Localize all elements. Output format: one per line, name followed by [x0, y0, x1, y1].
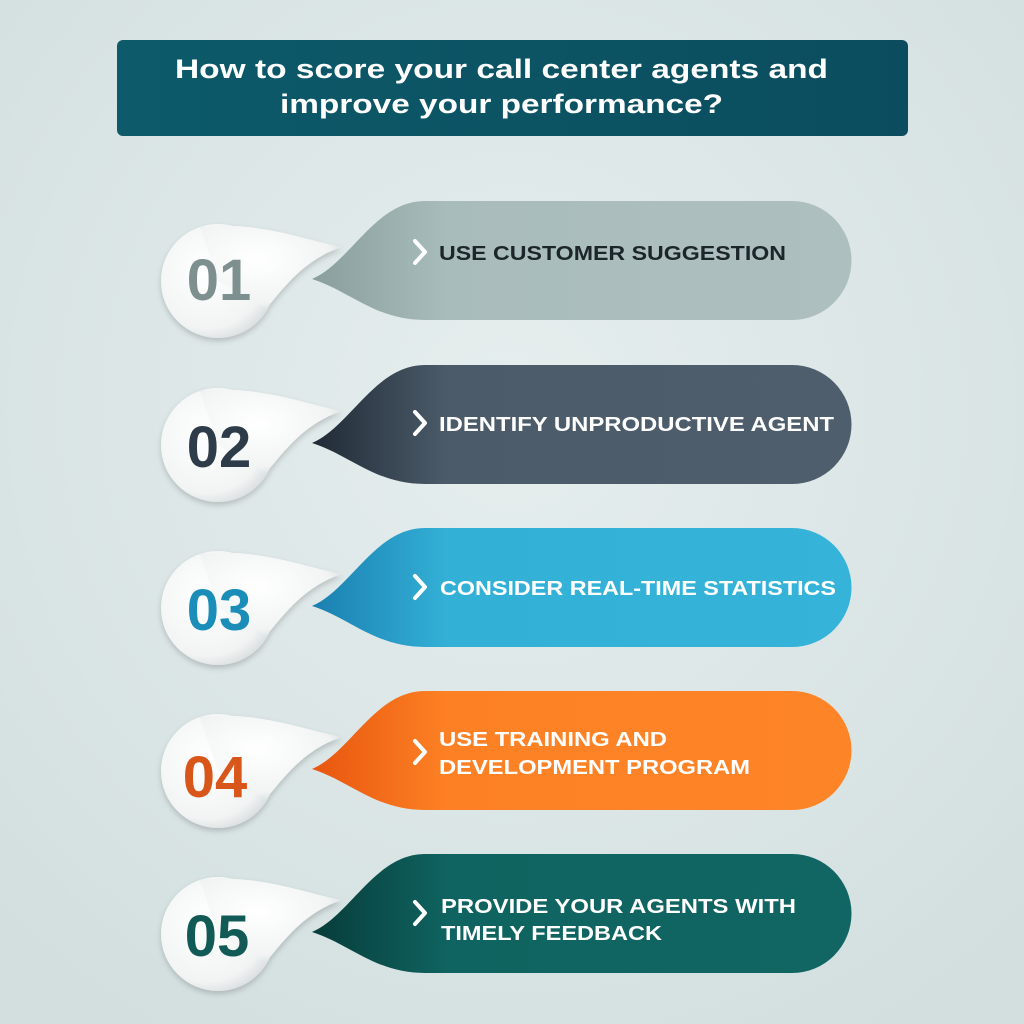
step 05: PROVIDE YOUR AGENTS WITH	[441, 896, 796, 918]
step 03: CONSIDER REAL-TIME STATISTICS	[440, 578, 836, 600]
step 01: 01	[187, 248, 251, 313]
step 04	[161, 691, 852, 828]
step 04: DEVELOPMENT PROGRAM	[439, 757, 750, 779]
step 03: 03	[187, 578, 251, 643]
title	[117, 40, 908, 136]
step 05: 05	[185, 904, 249, 969]
step 02	[161, 365, 852, 502]
step 05	[161, 854, 852, 991]
step 04: USE TRAINING AND	[439, 729, 667, 751]
step 01: USE CUSTOMER SUGGESTION	[439, 243, 786, 265]
title: How to score your call center agents and	[175, 54, 828, 84]
step 04: 04	[183, 745, 247, 810]
step 03	[161, 528, 852, 665]
title: improve your performance?	[280, 89, 723, 119]
step 05: TIMELY FEEDBACK	[441, 923, 663, 945]
step 02: 02	[187, 415, 251, 480]
step 01	[161, 201, 852, 338]
step 02: IDENTIFY UNPRODUCTIVE AGENT	[439, 414, 834, 436]
